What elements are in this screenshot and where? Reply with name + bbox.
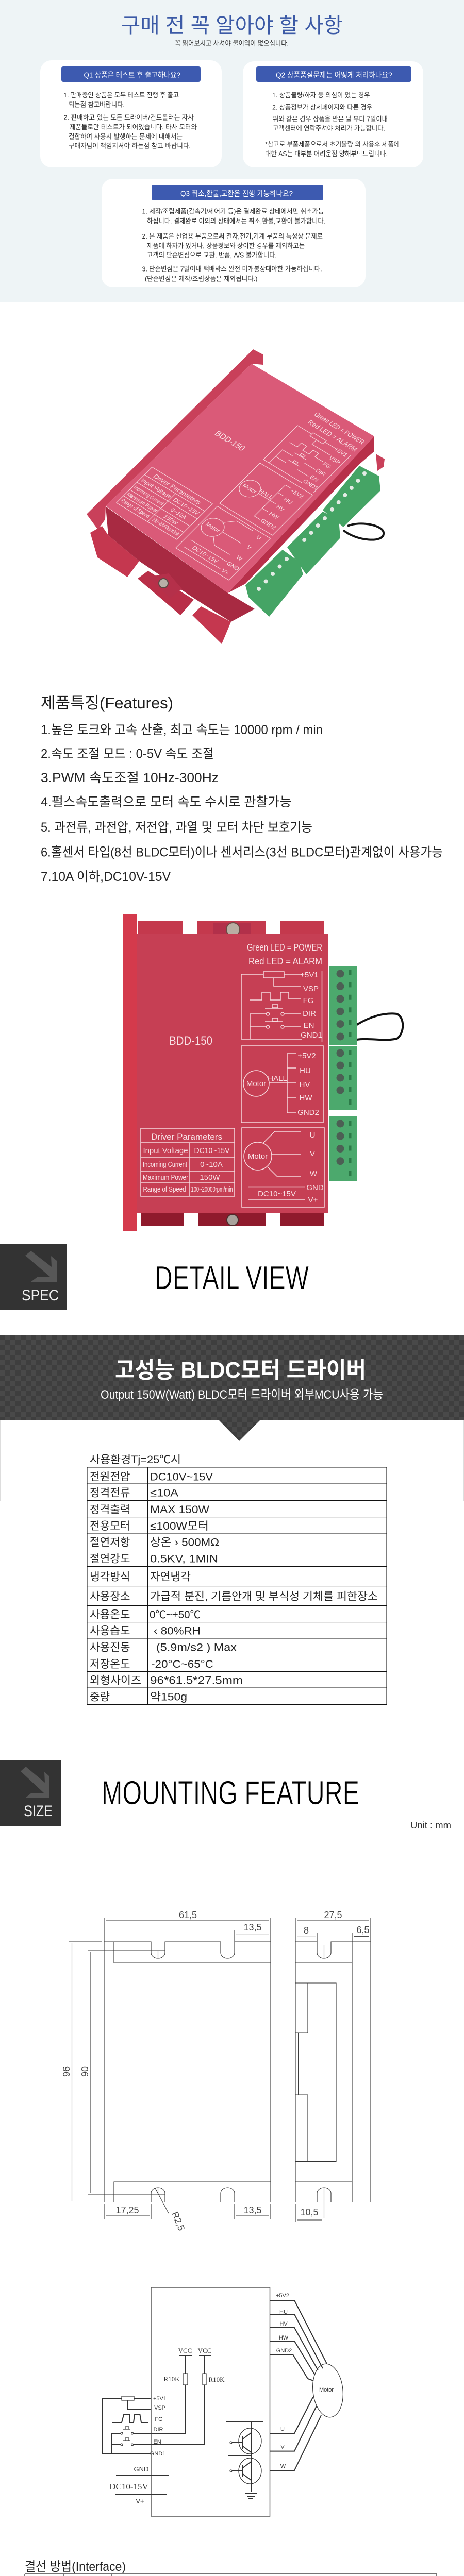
spec table: 0.5KV, 1MIN	[150, 1553, 218, 1565]
product photo: top view driver: HALL	[268, 1074, 287, 1083]
title: 구매 전 꼭 알아야 할 사항	[121, 14, 343, 37]
card: Q2	[243, 61, 423, 167]
product photo: isometric driver: EN	[308, 474, 320, 483]
dimension drawing: R2,5	[170, 2210, 187, 2232]
product photo: isometric driver: DIR	[314, 468, 327, 478]
wiring diagram: GND	[134, 2465, 148, 2473]
spec table: 사용습도	[90, 1625, 130, 1637]
product photo: top view driver: 150W	[200, 1173, 220, 1182]
product photo: isometric driver: V+	[220, 568, 230, 576]
dimension drawing: 13,5	[243, 1922, 262, 1933]
dimension drawing: 96	[61, 2066, 72, 2077]
product photo: top view driver: Maximum Power	[143, 1173, 188, 1182]
product photo: isometric driver: 0~10A	[169, 507, 188, 520]
spec table: 사용온도	[90, 1609, 130, 1621]
wiring diagram: HU	[279, 2309, 288, 2315]
banner: product title: Output 150W(Watt) BLDC모터 드라이버 외부MCU사용 가능	[101, 1388, 383, 1402]
dimension drawing: 17,25	[115, 2205, 139, 2215]
product photo: top view driver: DC10~15V	[258, 1190, 296, 1198]
product photo: top view driver: GND1	[301, 1031, 322, 1040]
wiring diagram: GND2	[276, 2348, 292, 2354]
spec table: 96*61.5*27.5mm	[150, 1674, 243, 1687]
spec table: 가급적 분진, 기름안개 및 부식성 기체를 피한장소	[150, 1591, 378, 1602]
dimension drawing	[61, 1910, 371, 2232]
product photo: top view driver: Input Voltage	[143, 1146, 188, 1155]
card: Q1	[40, 60, 222, 167]
product photo: top view driver: 0~10A	[200, 1160, 223, 1169]
wiring diagram: HV	[279, 2321, 288, 2327]
product photo: isometric driver: Driver Parameters	[152, 473, 203, 506]
spec table: 전원전압	[90, 1471, 130, 1483]
product photo: top view driver: GND	[306, 1183, 324, 1192]
features list	[41, 723, 443, 884]
product photo: top view driver: EN	[304, 1021, 314, 1030]
product photo: isometric driver: +5V1	[333, 447, 349, 458]
wiring diagram: VCC	[178, 2347, 192, 2354]
spec table: ‹ 80%RH	[154, 1625, 201, 1637]
card: Q3: 하십니다. 결제완료 이외의 상태에서는 취소,환불,교환이 불가합니다.	[147, 217, 325, 225]
spec table: 사용진동	[90, 1641, 130, 1654]
banner: product title	[0, 1335, 464, 1501]
product photo: isometric driver: V	[245, 545, 253, 551]
card: Q2: 2. 상품정보가 상세페이지와 다른 경우	[272, 103, 372, 111]
unit label: Unit : mm	[410, 1820, 451, 1831]
subtitle: 꼭 읽어보시고 사셔야 불이익이 없으십니다.	[175, 39, 289, 47]
wiring diagram: GND1	[150, 2451, 165, 2457]
product photo: isometric driver: VSP	[327, 455, 341, 466]
product photo: top view driver	[123, 914, 403, 1231]
product photo: top view driver: VSP	[303, 985, 319, 993]
product photo: isometric driver: HALL	[257, 488, 274, 500]
spec table: 0℃~+50℃	[150, 1609, 201, 1621]
product photo: top view driver: HU	[300, 1066, 311, 1075]
product photo: isometric driver: GND2	[259, 518, 277, 531]
product photo: isometric driver: Maximum Power	[125, 492, 159, 514]
spec table: 절연저항	[90, 1536, 130, 1549]
badge: size	[0, 1760, 61, 1826]
features list: 2.속도 조절 모드 : 0-5V 속도 조절	[41, 747, 214, 761]
spec table: DC10V~15V	[150, 1471, 213, 1483]
wiring diagram: VSP	[154, 2405, 165, 2411]
product photo: isometric driver: Incoming Current	[132, 485, 165, 507]
product photo: isometric driver: 100~20000rpm/min	[150, 517, 181, 537]
product photo: top view driver: Red LED = ALARM	[248, 956, 322, 967]
card: Q2: 위와 같은 경우 상품을 받은 날 부터 7일이내	[273, 115, 388, 123]
wiring diagram	[103, 2287, 345, 2516]
product photo: top view driver: HW	[299, 1094, 312, 1103]
wiring diagram: V+	[136, 2497, 144, 2505]
features list: 1.높은 토크와 고속 산출, 최고 속도는 10000 rpm / min	[41, 723, 323, 737]
product photo: isometric driver: GND1	[302, 479, 320, 492]
spec table: ≤10A	[150, 1487, 178, 1499]
product photo: top view driver: Driver Parameters	[151, 1132, 222, 1142]
product photo: top view driver: U	[310, 1131, 315, 1140]
spec table: 절연강도	[90, 1553, 130, 1565]
product photo: isometric driver: BDD-150	[212, 429, 247, 453]
wiring diagram: U	[280, 2426, 285, 2432]
caption: operating condition: 사용환경Tj=25℃시	[90, 1454, 181, 1466]
spec table: 냉각방식	[90, 1571, 130, 1583]
heading: detail view: DETAIL VIEW	[155, 1259, 309, 1296]
card: Q1: 결합하여 사용시 발생하는 문제에 대해서는	[69, 133, 183, 140]
spec table: 저장온도	[90, 1658, 130, 1670]
dimension drawing: 8	[304, 1925, 309, 1936]
features list: 5. 과전류, 과전압, 저전압, 과열 및 모터 차단 보호기능	[41, 820, 312, 835]
product photo: top view driver: HV	[300, 1080, 310, 1089]
card: Q1: 구매자님이 책임지셔야 하는점 참고 바랍니다.	[69, 142, 191, 149]
card: Q1: 2. 판매하고 있는 모든 드라이버/컨트롤러는 자사	[63, 113, 194, 122]
product photo: top view driver: GND2	[297, 1108, 319, 1117]
spec table: 중량	[90, 1691, 110, 1703]
wiring diagram: W	[280, 2463, 286, 2469]
product photo: top view driver: Motor	[246, 1079, 266, 1088]
product photo: isometric driver: Input Voltage	[139, 478, 173, 500]
card: Q3: 고객의 단순변심으로 교환, 반품, A/S 불가합니다.	[147, 251, 277, 259]
spec table	[87, 1467, 387, 1704]
dimension drawing: 61,5	[179, 1910, 197, 1920]
product photo: top view driver: FG	[303, 996, 313, 1005]
product photo: isometric driver: U	[255, 535, 262, 541]
wiring diagram: HW	[279, 2335, 289, 2341]
dimension drawing: 13,5	[243, 2205, 262, 2215]
card: Q2: *참고로 부품제품으로서 초기불량 외 사용후 제품에	[265, 140, 400, 148]
product photo: isometric driver: HV	[275, 504, 286, 513]
product photo: top view driver: W	[310, 1170, 318, 1178]
spec table: MAX 150W	[150, 1504, 209, 1516]
heading: interface: 결선 방법(Interface)	[25, 2560, 126, 2574]
wiring diagram: R10K	[163, 2375, 180, 2383]
card: Q3: 1. 제작/조립제품(감속기/제어기 등)은 결제완료 상태에서만 취소가능	[142, 207, 324, 215]
product photo: top view driver: BDD-150	[169, 1034, 212, 1048]
wiring diagram: R10K	[208, 2376, 225, 2383]
product photo: isometric driver: Motor	[241, 483, 258, 495]
card: Q3: 제품에 하자가 있거나, 상품정보와 상이한 경우를 제외하고는	[147, 242, 305, 249]
product photo: top view driver: Incoming Current	[143, 1160, 188, 1169]
product photo: isometric driver: HU	[282, 497, 293, 505]
card: Q3: 2. 본 제품은 산업용 부품으로써 전자,전기,기계 부품의 특성상 문제로	[142, 232, 323, 240]
product photo: top view driver: +5V1	[300, 971, 319, 979]
badge: size: SIZE	[24, 1803, 53, 1820]
card: Q3: Q3 취소,환불,교환은 진행 가능하나요?	[180, 190, 293, 198]
features list: 3.PWM 속도조절 10Hz-300Hz	[41, 771, 219, 785]
product photo: isometric driver: DC10~15V	[172, 497, 201, 516]
spec table: 자연냉각	[150, 1571, 191, 1583]
product photo: isometric driver: FG	[321, 461, 332, 470]
dimension drawing: 6,5	[356, 1925, 370, 1935]
product photo: top view driver: DIR	[303, 1009, 316, 1018]
product photo: top view driver: Range of Speed	[143, 1185, 186, 1194]
features list: 6.홀센서 타입(8선 BLDC모터)이나 센서리스(3선 BLDC모터)관계없이 사용가능	[41, 845, 443, 859]
card: Q2: Q2 상품품질문제는 어떻게 처리하나요?	[276, 71, 392, 79]
wiring diagram: VCC	[198, 2347, 211, 2354]
product photo: isometric driver: DC10~15V	[191, 545, 220, 565]
heading: features: 제품특징(Features)	[41, 694, 173, 712]
features list: 7.10A 이하,DC10V-15V	[41, 870, 171, 884]
card: Q3: 3. 단순변심은 7일이내 택배박스 완전 미개봉상태야한 가능하십니다.	[142, 265, 322, 273]
badge: spec	[0, 1244, 67, 1310]
wiring diagram: EN	[153, 2439, 161, 2445]
product photo: isometric driver: HW	[268, 511, 280, 520]
product photo: isometric driver: Range of Speed	[119, 498, 151, 519]
wiring diagram: +5V2	[276, 2293, 289, 2299]
spec table: 외형사이즈	[90, 1674, 141, 1687]
spec table: -20°C~65°C	[151, 1658, 213, 1670]
product photo: isometric driver: 150W	[162, 514, 179, 526]
product photo: top view driver: V+	[308, 1196, 318, 1205]
card: Q2: 1. 상품불량/하자 등 의심이 있는 경우	[272, 91, 370, 99]
product photo: top view driver: 100~20000rpm/min	[191, 1185, 233, 1194]
spec table: 사용장소	[90, 1591, 130, 1602]
product photo: isometric driver: GND	[225, 561, 240, 572]
wiring diagram: +5V1	[153, 2396, 167, 2402]
spec table: ≤100W모터	[150, 1520, 209, 1532]
wiring diagram: Motor	[319, 2387, 334, 2393]
features list: 4.펄스속도출력으로 모터 속도 수시로 관찰가능	[41, 795, 292, 809]
spec table: 상온 › 500MΩ	[150, 1536, 219, 1549]
product photo: top view driver: Green LED = POWER	[247, 942, 322, 953]
panel: purchase notice	[0, 0, 464, 302]
spec table: (5.9m/s2 ) Max	[156, 1641, 237, 1654]
heading: mounting feature: MOUNTING FEATURE	[102, 1774, 359, 1811]
product photo: isometric driver: Green LED = POWER	[312, 411, 367, 446]
card: Q2: 고객센터에 연락주셔야 처리가 가능합니다.	[273, 125, 385, 132]
card: Q1: 되는점 참고바랍니다.	[69, 101, 125, 108]
card: Q3	[102, 179, 366, 287]
card: Q2: 대한 AS는 대부분 어려운점 양해부탁드립니다.	[265, 150, 388, 158]
card: Q1: 1. 판매중인 상품은 모두 테스트 진행 후 출고	[63, 91, 179, 99]
banner: product title: 고성능 BLDC모터 드라이버	[115, 1358, 366, 1383]
card: Q1: Q1 상품은 테스트 후 출고하나요?	[84, 71, 180, 79]
wiring diagram: DIR	[154, 2427, 163, 2433]
spec table: 정격출력	[90, 1504, 130, 1516]
product photo: top view driver: DC10~15V	[194, 1146, 230, 1155]
product photo: isometric driver	[87, 349, 385, 644]
badge: spec: SPEC	[22, 1287, 59, 1304]
card: Q3: (단순변심은 제작/조립상품은 제외됩니다.)	[145, 275, 258, 282]
dimension drawing: 90	[80, 2066, 90, 2077]
product photo: top view driver: Motor	[248, 1152, 268, 1161]
interface table	[25, 2574, 437, 2576]
spec table: 약150g	[150, 1691, 187, 1703]
wiring diagram: FG	[155, 2416, 163, 2422]
product photo: isometric driver: Motor	[204, 521, 221, 534]
dimension drawing: 10,5	[300, 2207, 319, 2217]
product photo: top view driver: +5V2	[297, 1052, 316, 1060]
dimension drawing: 27,5	[324, 1910, 342, 1920]
product photo: isometric driver: Red LED = ALARM	[306, 419, 359, 453]
product photo: isometric driver: W	[235, 555, 244, 562]
spec table: 정격전류	[90, 1487, 130, 1499]
wiring diagram: DC10-15V	[109, 2482, 148, 2492]
wiring diagram: V	[280, 2444, 285, 2450]
spec table: 전용모터	[90, 1520, 130, 1532]
product photo: isometric driver: +5V2	[289, 488, 305, 500]
product photo: top view driver: V	[310, 1149, 315, 1158]
card: Q1: 제품들로만 테스트가 되어있습니다. 타사 모터와	[70, 123, 197, 131]
